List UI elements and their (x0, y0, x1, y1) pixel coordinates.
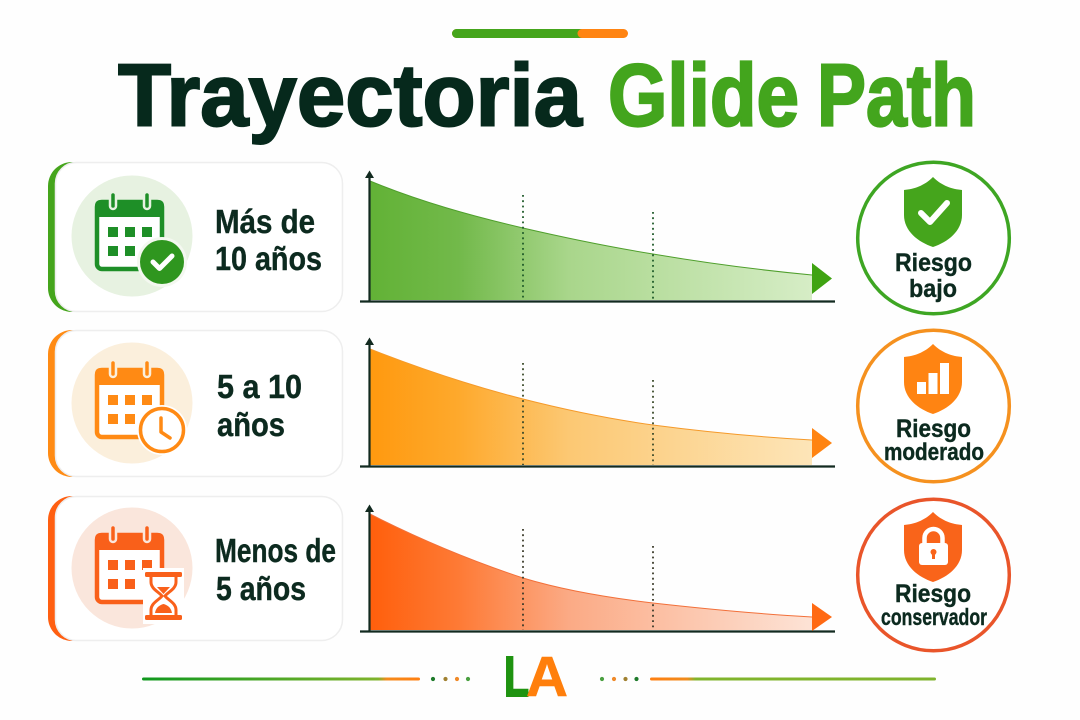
title: Glide (608, 46, 799, 144)
footer divider right (600, 677, 936, 681)
title: Path (817, 46, 976, 144)
panel: menos de 5 años (48, 496, 342, 641)
card accent and body (48, 162, 342, 312)
card accent and body (48, 330, 342, 477)
badge: riesgo conservador: Riesgo (895, 580, 971, 608)
icon: calendar with check (72, 176, 192, 296)
badge: riesgo moderado (858, 330, 1009, 482)
label: 5 a 10 años (217, 368, 302, 443)
label: menos de 5 años: 5 años (216, 570, 306, 607)
label: 5 a 10 años: años (217, 406, 285, 443)
label: más de 10 años: 10 años (215, 240, 322, 277)
badge: riesgo bajo: bajo (909, 275, 957, 303)
icon: calendar with hourglass (72, 508, 192, 628)
icon: shield lock (904, 512, 962, 582)
chart: red-orange glide path (360, 504, 835, 632)
badge: riesgo conservador (858, 499, 1009, 651)
footer divider left (142, 677, 470, 681)
label: más de 10 años: Más de (215, 203, 315, 240)
label: menos de 5 años: Menos de (215, 532, 336, 569)
logo: LA (504, 645, 568, 709)
title (118, 46, 976, 144)
icon: shield bars (904, 344, 962, 414)
panel: 5 a 10 años (48, 330, 342, 477)
title: Trayectoria (118, 46, 583, 144)
chart: orange glide path (360, 338, 835, 467)
badge: riesgo moderado: Riesgo (896, 415, 971, 443)
badge: riesgo bajo (858, 162, 1009, 314)
label: más de 10 años (215, 203, 322, 277)
badge: riesgo conservador: conservador (881, 604, 987, 630)
top accent bar (452, 29, 628, 38)
label: 5 a 10 años: 5 a 10 (217, 368, 302, 405)
panel: más de 10 años (48, 162, 342, 312)
logo: LA: L (504, 645, 529, 709)
icon: calendar with clock (72, 342, 192, 464)
logo: LA: A (526, 645, 568, 709)
icon: shield check (904, 177, 962, 247)
label: menos de 5 años (215, 532, 336, 607)
badge: riesgo bajo: Riesgo (895, 249, 972, 277)
card accent and body (48, 496, 342, 641)
badge: riesgo moderado: moderado (884, 439, 984, 466)
chart: green glide path (360, 170, 835, 302)
